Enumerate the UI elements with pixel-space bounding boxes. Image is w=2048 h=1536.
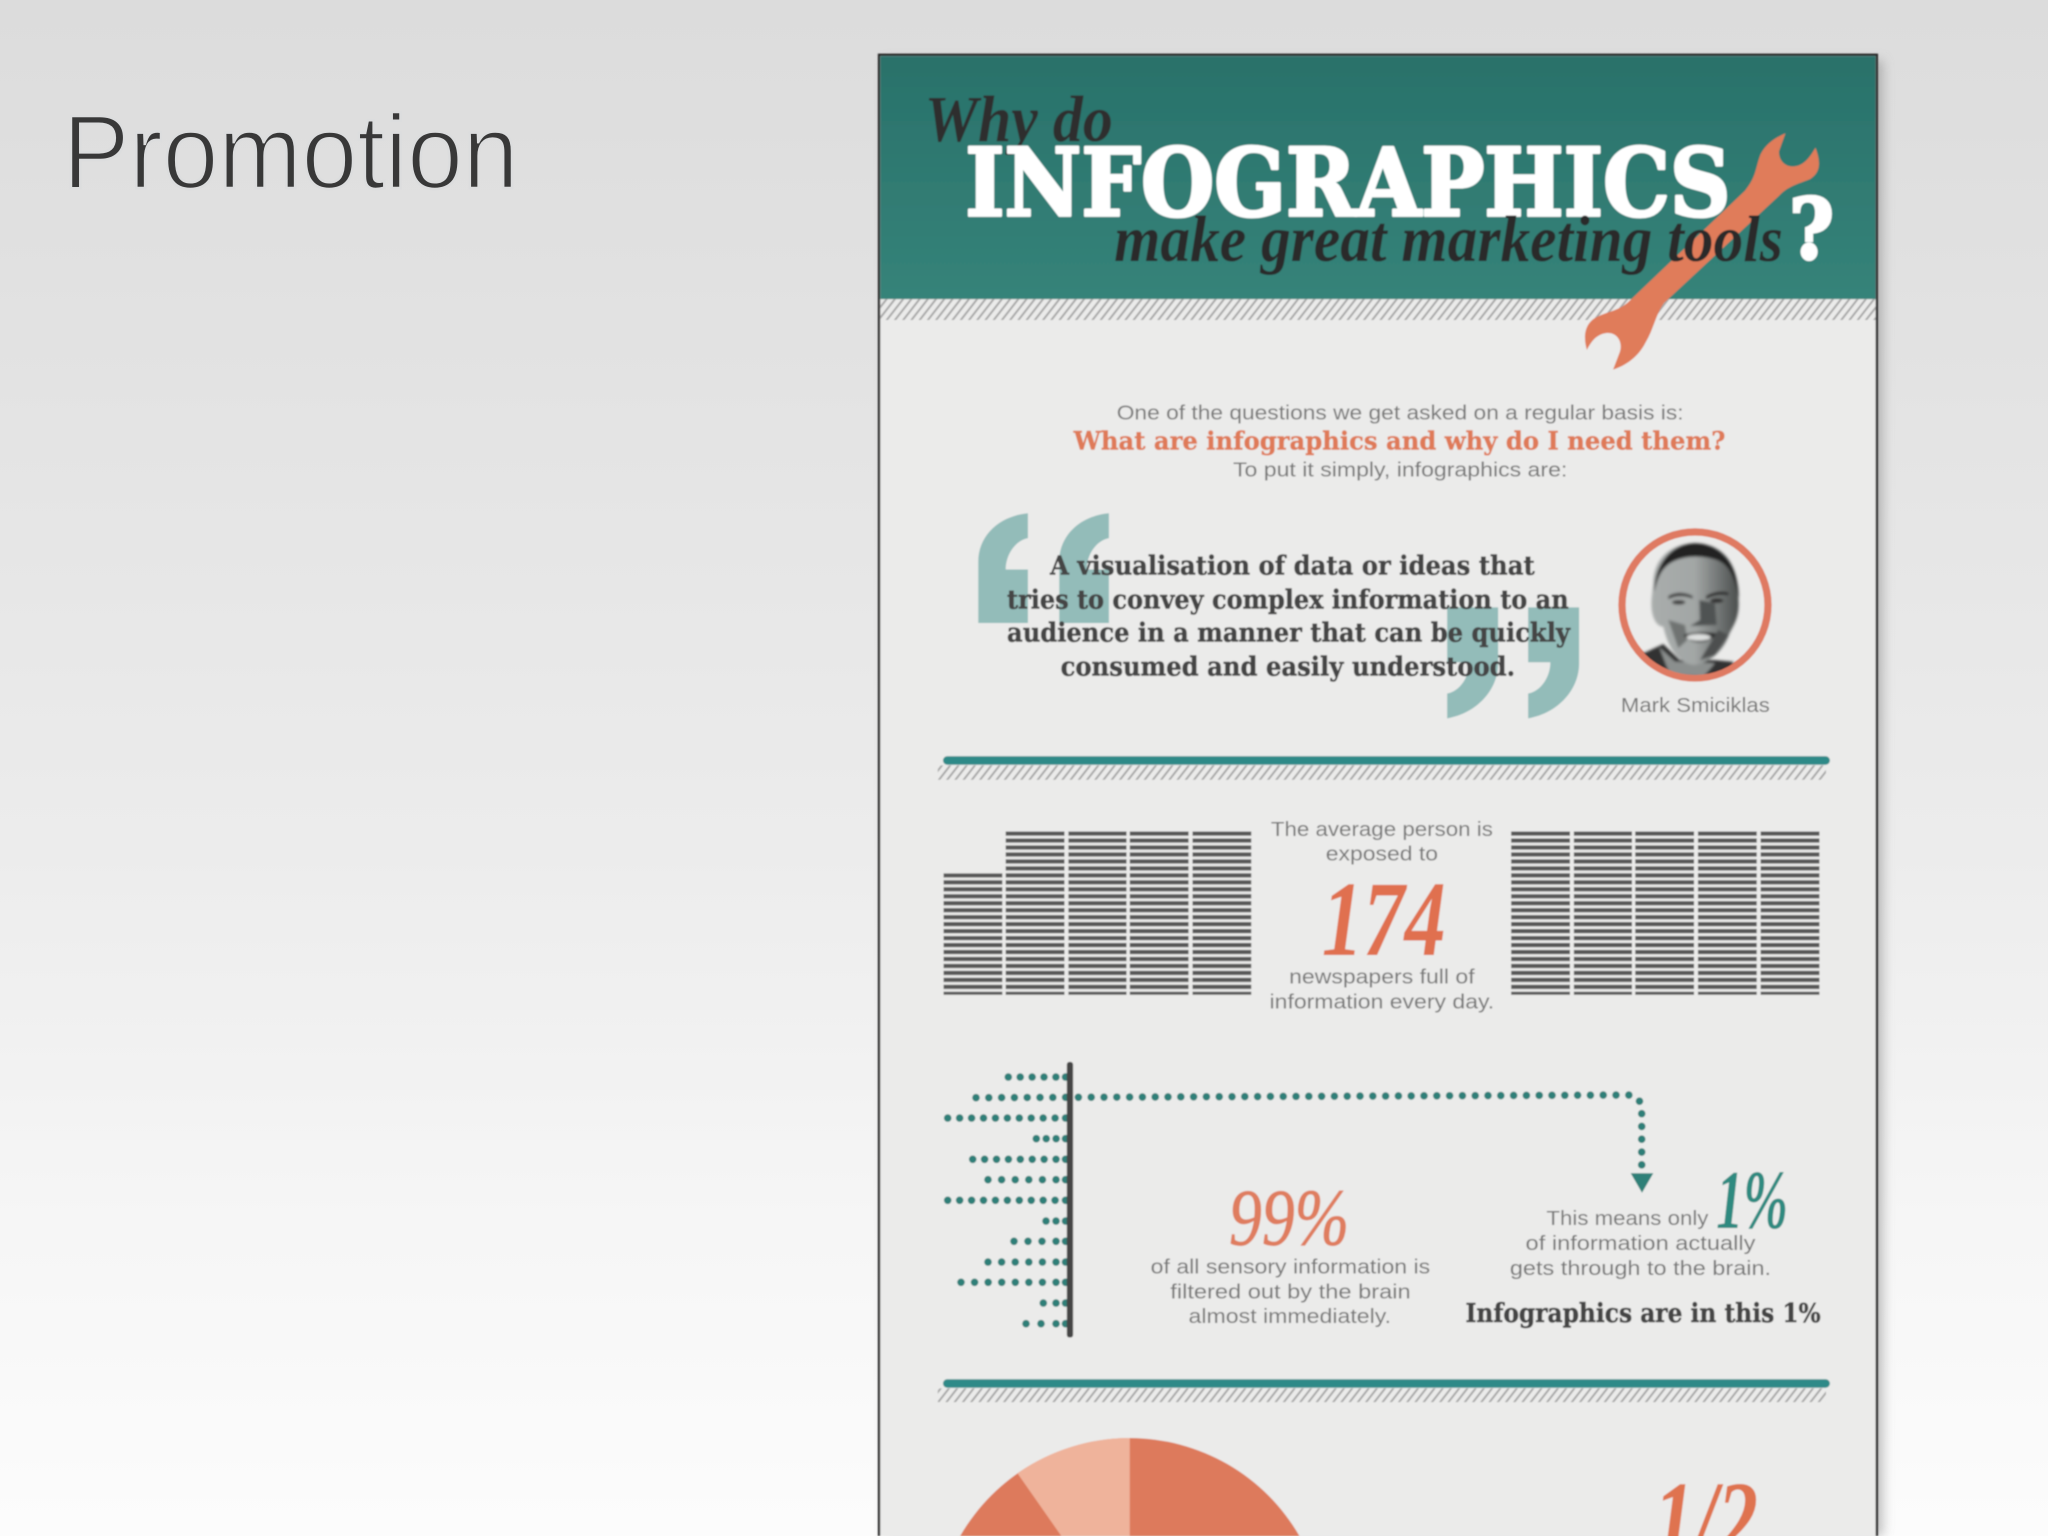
intro text: One of the questions we get asked on a regular basis is:: [1117, 402, 1684, 424]
stat: 1% gets through: This means only: [1546, 1208, 1709, 1230]
heading: why do infographics make great marketing tools: Why do: [925, 84, 1113, 156]
header band: [880, 56, 1876, 299]
stat: 174 newspapers: information every day.: [1270, 991, 1494, 1013]
slide title: Promotion: [63, 94, 519, 211]
stat: 174 newspapers: newspapers full of: [1289, 967, 1475, 989]
stat: 174 newspapers: The average person is: [1271, 819, 1493, 841]
stat: 174 newspapers: [1270, 819, 1494, 1013]
caption: Mark Smiciklas: Mark Smiciklas: [1621, 695, 1770, 717]
stat: 1% gets through: gets through to the brain.: [1510, 1258, 1771, 1280]
panel: infographic poster: [879, 55, 1883, 1536]
heading: why do infographics make great marketing tools: [925, 84, 1834, 279]
stat: 1% gets through: of information actually: [1526, 1233, 1756, 1255]
quote text: [1007, 551, 1571, 682]
stat: 99% filtered: of all sensory information is: [1151, 1256, 1430, 1278]
divider: [938, 1379, 1830, 1402]
quote text: audience in a manner that can be quickly: [1007, 617, 1571, 648]
stat: 1% gets through: Infographics are in this 1%: [1465, 1298, 1821, 1329]
quote text: consumed and easily understood.: [1061, 651, 1515, 682]
intro text: To put it simply, infographics are:: [1233, 460, 1567, 482]
stat: 174 newspapers: 174: [1322, 861, 1446, 979]
header hatch strip: [880, 299, 1876, 320]
stat: 1% gets through: [1465, 1155, 1821, 1329]
chart: newspaper blocks right: [1511, 831, 1819, 995]
stat: 99% filtered: filtered out by the brain: [1170, 1281, 1411, 1303]
chart: filtered information dots: [948, 1077, 1066, 1324]
quote text: tries to convey complex information to an: [1007, 585, 1569, 616]
intro text: What are infographics and why do I need them?: [1073, 426, 1725, 455]
icon: opening quotation mark: [978, 513, 1109, 623]
heading: why do infographics make great marketing tools: INFOGRAPHICS: [965, 129, 1731, 239]
intro text: [1073, 402, 1725, 482]
chart: pie: [960, 1438, 1299, 1536]
stat: 1% gets through: 1%: [1716, 1155, 1788, 1247]
heading: why do infographics make great marketing tools: make great marketing tools: [1114, 204, 1783, 276]
icon: closing quotation mark: [1447, 607, 1579, 718]
stat: 99% filtered: almost immediately.: [1189, 1306, 1391, 1328]
stat: 174 newspapers: exposed to: [1326, 844, 1438, 866]
divider: [938, 756, 1830, 780]
heading: why do infographics make great marketing tools: ?: [1789, 181, 1834, 279]
stat: 99% filtered: [1151, 1173, 1430, 1328]
portrait: Mark Smiciklas: [1622, 532, 1768, 680]
filter bar: [1067, 1062, 1073, 1337]
stat: 99% filtered: 99%: [1229, 1173, 1349, 1263]
arrow: dotted path to 1%: [976, 1095, 1653, 1193]
chart: newspaper blocks left: [944, 831, 1251, 995]
quote text: A visualisation of data or ideas that: [1049, 551, 1535, 582]
icon: wrench: [1585, 133, 1819, 370]
